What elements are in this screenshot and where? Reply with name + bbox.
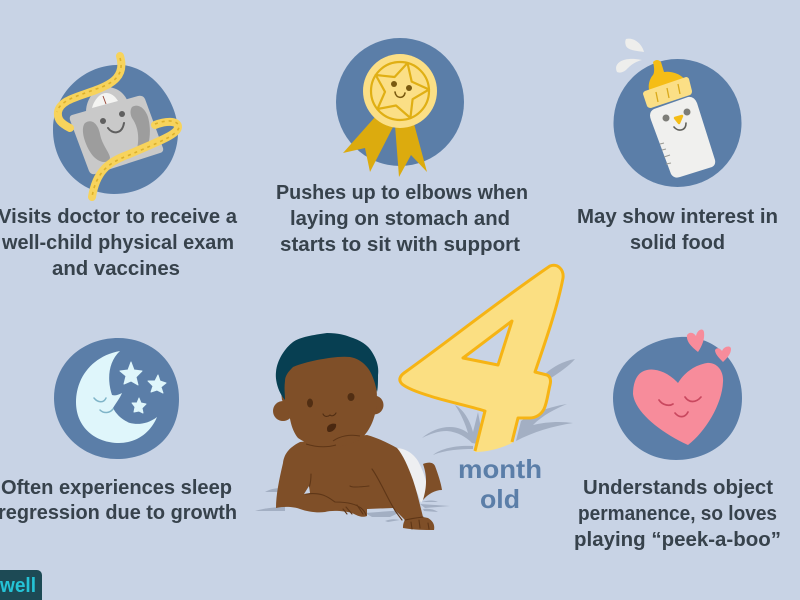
text: motor skills: Pushes up to elbows when [276,182,528,204]
text: month old [458,454,542,514]
text: object permanence [574,477,781,551]
text: motor skills: laying on stomach and [290,208,510,230]
panel: object permanence [574,329,781,551]
text: object permanence: permanence, so loves [578,503,777,525]
icon: diaper [395,448,427,503]
text: doctor visit: and vaccines [52,258,180,280]
text: month old: month [458,454,542,484]
text: solid food: solid food [630,232,725,254]
text: sleep regression: regression due to growth [0,502,237,524]
icon: heart [613,329,742,460]
icon: scale and measuring tape [53,56,179,197]
text: doctor visit [0,206,238,280]
icon: baby bottle [614,39,742,187]
icon: number 4 with cracks [400,265,575,455]
text: sleep regression: Often experiences sleep [1,477,232,499]
icon: sleeping moon and stars [54,338,179,459]
text: doctor visit: well-child physical exam [1,232,234,254]
text: motor skills: starts to sit with support [280,234,520,256]
icon: baby body [276,435,434,530]
icon: face [307,398,313,408]
icon: star medal [336,38,464,177]
text: sleep regression [0,477,237,524]
text: motor skills [276,182,528,256]
logo: verywell: well [0,575,36,597]
panel: sleep regression [0,338,237,524]
text: solid food [577,206,778,254]
text: object permanence: Understands object [583,477,773,499]
logo: verywell [0,570,42,600]
panel: baby illustration [255,333,450,530]
panel: doctor visit [0,56,238,280]
panel: motor skills [276,38,528,256]
text: doctor visit: Visits doctor to receive a [0,206,238,228]
text: object permanence: playing “peek-a-boo” [574,529,781,551]
icon: armpit gap [304,486,310,494]
icon: baby arm lines [306,469,429,529]
icon: ground shadows near baby [255,488,450,522]
panel: solid food [577,39,778,254]
text: month old: old [480,484,520,514]
text: solid food: May show interest in [577,206,778,228]
icon: baby leg [423,463,442,500]
icon: hair [276,333,378,400]
icon: baby head [273,333,384,447]
